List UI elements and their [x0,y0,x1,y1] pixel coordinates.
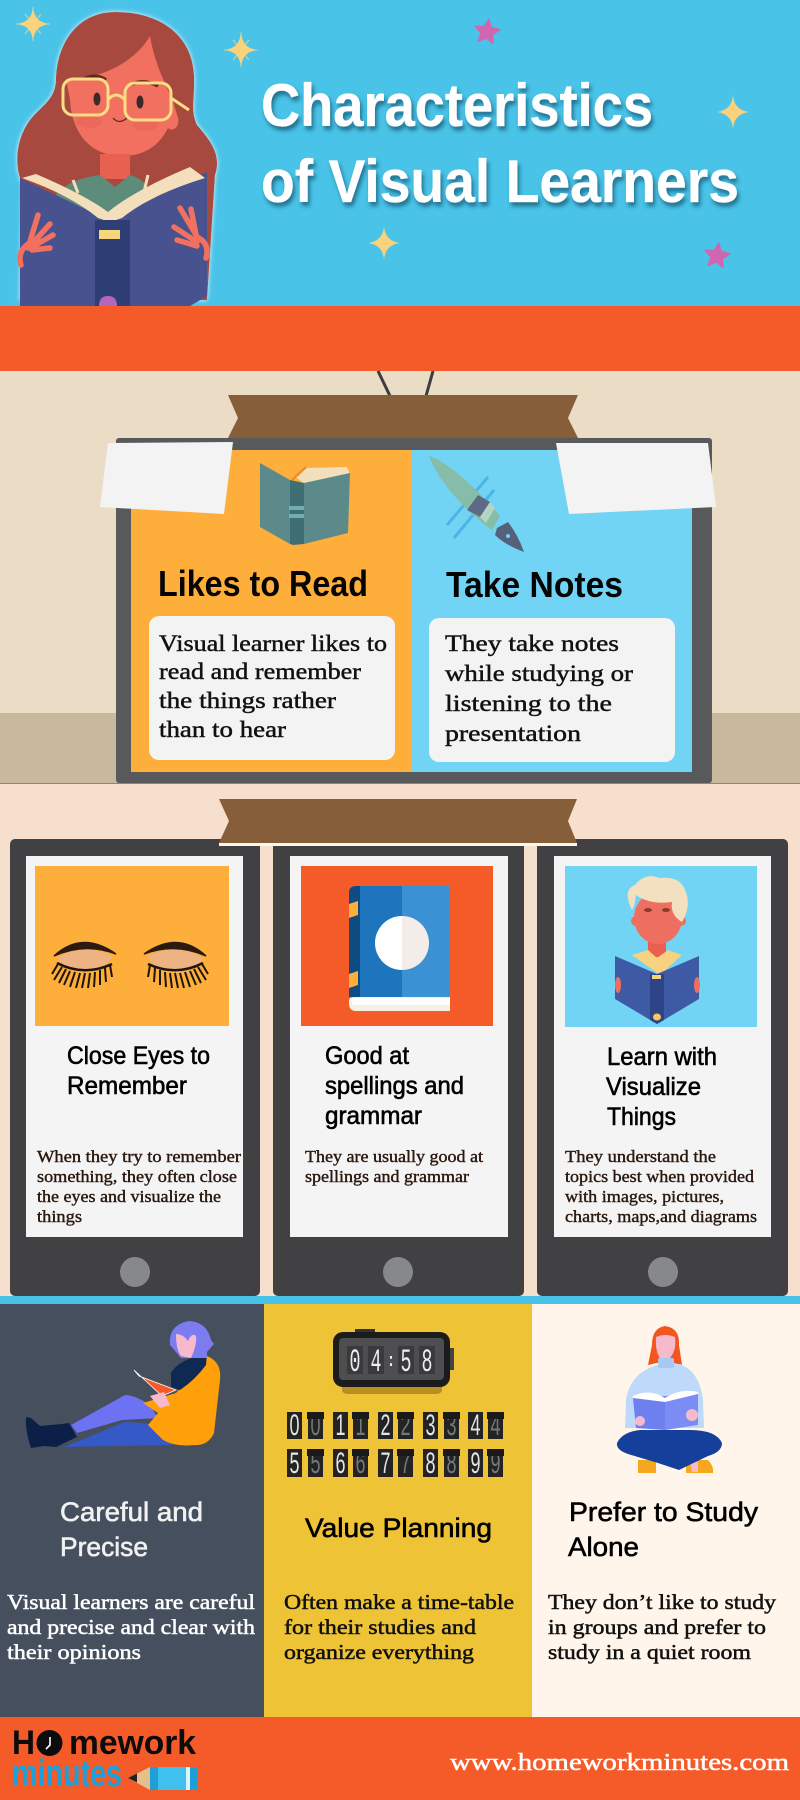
icon: pencil [128,1767,197,1790]
antenna wires [378,371,433,396]
illustration: flip digits: 1 [336,1409,346,1442]
board frame [116,438,712,783]
heading: Likes to Read [158,563,368,604]
website url: www.homeworkminutes.com [450,1750,789,1776]
illustration: flip digits: 8 [446,1447,456,1480]
phone: visualize [537,839,788,1296]
text card: Visual learner likes to [159,631,387,656]
logo: Homework minutes: mework [69,1724,196,1762]
description: Often make a time-table [284,1590,514,1614]
title: Characteristics [261,72,653,139]
illustration: flip digits: 9 [490,1447,500,1480]
description [548,1590,776,1664]
icon: gold plus sparkle bottom [368,226,400,260]
text card: They take notes [445,631,619,656]
icon: fountain pen [429,456,524,552]
text card: while studying or [445,661,633,686]
illustration: flip digits: 7 [400,1447,410,1480]
illustration: flip digits: 3 [446,1409,456,1442]
tape right [556,443,716,514]
description: When they try to remember [37,1147,242,1166]
icon: gold plus sparkle right [717,95,749,129]
panel: likes to read [131,450,411,772]
illustration: flip digits: 0 [310,1409,320,1442]
heading [60,1497,203,1562]
orange band [0,306,800,371]
heading [568,1497,759,1562]
illustration: flip digits: 3 [426,1409,436,1442]
heading: Close Eyes to [67,1042,210,1070]
text card [429,618,675,762]
illustration: flip clock: 4 [370,1344,382,1381]
description: They are usually good at [305,1147,483,1166]
brown banner [228,395,578,438]
illustration: flip digits: 5 [310,1447,320,1480]
illustration: flip digits: 2 [380,1409,390,1442]
home button [648,1257,678,1287]
description [284,1590,514,1664]
panel: header [0,0,800,306]
description: their opinions [7,1640,141,1664]
home button [383,1257,413,1287]
text card: read and remember [159,659,361,684]
description: organize everything [284,1640,474,1664]
heading: spellings and [325,1072,464,1100]
description: They don’t like to study [548,1590,776,1614]
panel: value planning [264,1304,532,1717]
illustration: flip digits: 1 [356,1409,366,1442]
description: spellings and grammar [305,1167,470,1186]
description: and precise and clear with [7,1615,255,1639]
illustration: flip digits: 5 [290,1447,300,1480]
illustration: flip clock [333,1329,454,1394]
description [565,1147,757,1226]
heading: Remember [67,1072,187,1100]
panel: notice board section [0,371,800,784]
image: closed eyes [35,866,229,1026]
icon: pink star bottom [703,241,731,268]
description: the eyes and visualize the [37,1187,221,1206]
illustration: flip digits: 9 [470,1447,480,1480]
description: They understand the [565,1147,716,1166]
illustration: woman sitting cross-legged [617,1326,722,1473]
heading: Careful and [60,1497,203,1527]
phone: close eyes [10,839,260,1296]
panel: footer [0,1717,800,1800]
heading: Things [607,1103,676,1131]
panel: prefer to study alone [532,1304,800,1717]
illustration: girl reading a book [17,12,217,306]
icon: gold sparkle top left [16,7,50,41]
phone: spelling [273,839,524,1296]
image: boy reading [565,866,757,1027]
illustration: flip digits: 8 [426,1447,436,1480]
heading [325,1042,464,1130]
description: in groups and prefer to [548,1615,766,1639]
icon: teal book [260,459,350,545]
heading: grammar [325,1102,422,1130]
text card: presentation [445,721,582,746]
illustration: flip digits: 7 [380,1447,390,1480]
description: things [37,1207,82,1226]
brown banner [219,799,577,846]
text card: than to hear [159,717,286,742]
heading: Alone [568,1532,639,1562]
illustration: flip digits: 6 [336,1447,346,1480]
description: with images, pictures, [565,1187,724,1206]
heading: Good at [325,1042,409,1070]
description: topics best when provided [565,1167,755,1186]
illustration: flip clock: 0 [350,1344,360,1381]
icon: clock [36,1730,62,1756]
description: for their studies and [284,1615,476,1639]
heading: Precise [60,1532,148,1562]
illustration: flip clock: : [386,1352,396,1372]
text card [149,616,395,760]
title: of Visual Learners [261,148,739,215]
description [7,1590,255,1664]
blue divider [0,1296,800,1304]
description [37,1147,242,1226]
heading: Learn with [607,1043,717,1071]
heading: Visualize [606,1073,701,1101]
heading: Take Notes [446,564,623,605]
description: charts, maps,and diagrams [565,1207,757,1226]
panel: phones section [0,784,800,1296]
text card: the things rather [159,688,336,713]
illustration: flip digits: 4 [490,1409,500,1442]
illustration: flip digits: 2 [400,1409,410,1442]
description: something, they often close [37,1167,237,1186]
panel: careful and precise [0,1304,264,1717]
logo: Homework minutes: minutes [12,1753,122,1795]
tape left [100,442,233,514]
panel: take notes [411,450,692,772]
illustration: flip clock: 8 [422,1344,432,1381]
illustration: flip digits: 4 [470,1409,480,1442]
heading [67,1042,210,1100]
illustration: flip clock: 5 [400,1344,412,1381]
description: study in a quiet room [548,1640,751,1664]
description: Visual learners are careful [7,1590,255,1614]
illustration: woman reclining [26,1321,220,1448]
illustration: flip digits: 6 [356,1447,366,1480]
description [305,1147,483,1186]
illustration: flip digits [287,1409,504,1480]
logo: Homework minutes [12,1724,197,1795]
text card: listening to the [445,691,612,716]
illustration: flip digits: 0 [290,1409,300,1442]
heading: Value Planning [305,1513,492,1543]
icon: pink star top [473,17,501,44]
title [261,72,739,215]
heading: Prefer to Study [569,1497,759,1527]
heading [606,1043,717,1131]
home button [120,1257,150,1287]
logo: Homework minutes: H [12,1724,35,1762]
image: blue book [301,866,493,1026]
icon: gold sparkle near girl [224,32,258,67]
